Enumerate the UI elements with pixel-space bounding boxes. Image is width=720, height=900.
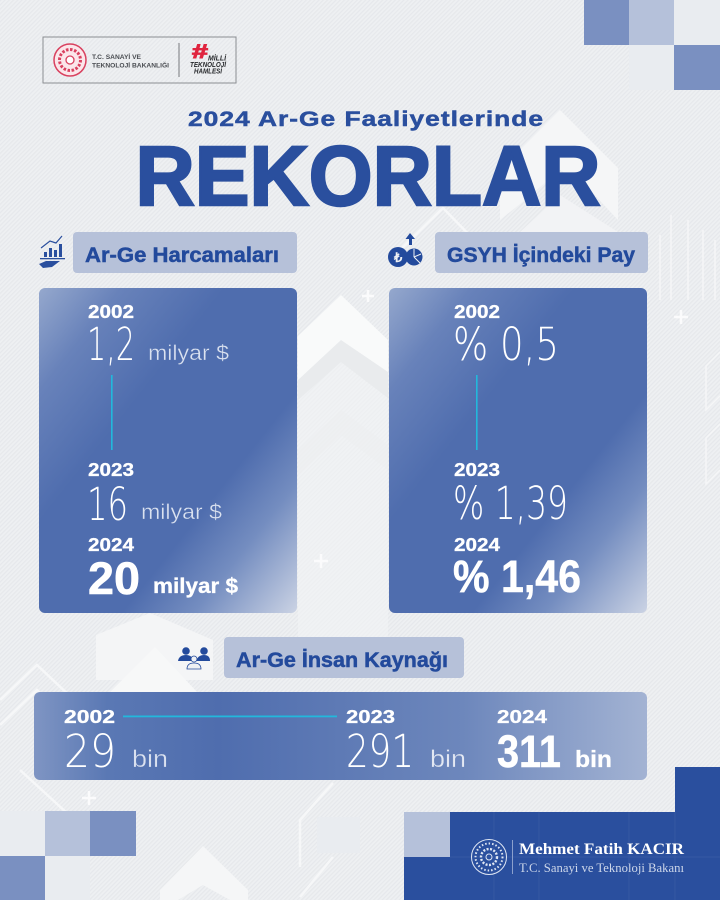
- value 2002: % 0,5: [453, 318, 559, 371]
- icon: coins and arrow: [388, 233, 422, 267]
- milli teknoloji hamlesi mark: HAMLESİ: [194, 68, 223, 76]
- bottom left squares: [0, 811, 136, 900]
- headline: REKORLAR: [136, 129, 600, 223]
- minister name: Mehmet Fatih KACIR: [519, 841, 685, 858]
- ministry name: TEKNOLOJİ BAKANLIĞI: [92, 60, 169, 70]
- value 2023: % 1,39: [453, 477, 568, 530]
- value 2024: 20: [88, 553, 140, 604]
- divider: [512, 840, 513, 874]
- divider: [178, 43, 180, 77]
- panel: Ar-Ge İnsan Kaynağı: 2023: [346, 707, 395, 727]
- panel: GSYH İçindeki Pay: 2024: [454, 535, 500, 555]
- milli teknoloji hamlesi mark: #: [192, 42, 209, 63]
- value 2023: [87, 478, 222, 531]
- panel: Ar-Ge İnsan Kaynağı: 2002: [64, 707, 115, 727]
- panel: Ar-Ge Harcamaları: 2024: [88, 535, 134, 555]
- section: Ar-Ge Harcamaları: [39, 232, 297, 273]
- value 2024: [497, 726, 612, 777]
- value 2024: [88, 553, 238, 604]
- ministry name: T.C. SANAYİ VE: [92, 53, 141, 61]
- panel: GSYH İçindeki Pay: 2023: [454, 460, 500, 480]
- heading pill: [435, 232, 648, 273]
- heading pill: Ar-Ge Harcamaları: [85, 244, 279, 267]
- footer: minister block: [404, 767, 720, 900]
- panel: Ar-Ge Harcamaları: 2002: [88, 302, 134, 322]
- heading pill: Ar-Ge İnsan Kaynağı: [236, 649, 448, 672]
- icon: people: [178, 647, 210, 669]
- heading pill: [224, 637, 464, 678]
- value 2023: 291: [346, 725, 414, 778]
- icon: ministry emblem: [54, 44, 86, 76]
- panel: Ar-Ge Harcamaları: 2023: [88, 460, 134, 480]
- section: GSYH İçindeki Pay: [388, 232, 648, 273]
- connector line: [476, 375, 478, 450]
- value 2023: milyar $: [141, 501, 222, 524]
- value 2024: bin: [575, 746, 612, 772]
- panel: GSYH İçindeki Pay: 2002: [454, 302, 500, 322]
- milli teknoloji hamlesi mark: TEKNOLOJİ: [190, 61, 227, 69]
- icon: coins and arrow: ₺: [393, 250, 403, 265]
- value 2002: [87, 318, 229, 371]
- icon: ministry emblem: [472, 840, 506, 874]
- value 2023: 16: [87, 478, 128, 531]
- value 2002: milyar $: [148, 342, 229, 365]
- milli teknoloji hamlesi mark: [190, 42, 227, 76]
- value 2024: % 1,46: [453, 551, 581, 602]
- value 2023: bin: [430, 746, 466, 773]
- value 2002: bin: [132, 746, 168, 773]
- value 2002: 1,2: [87, 318, 135, 371]
- panel: Ar-Ge Harcamaları: [39, 288, 297, 613]
- value 2002: 29: [64, 725, 116, 778]
- section: Ar-Ge İnsan Kaynağı: [178, 637, 464, 678]
- panel: Ar-Ge İnsan Kaynağı: [34, 692, 647, 780]
- icon: hand with bar chart: [39, 236, 65, 268]
- panel: Ar-Ge İnsan Kaynağı: 2024: [497, 707, 547, 727]
- connector line: [123, 716, 337, 717]
- heading pill: [73, 232, 297, 273]
- value 2024: 311: [497, 726, 561, 777]
- subtitle line: 2024 Ar-Ge Faaliyetlerinde: [188, 107, 544, 131]
- minister title: T.C. Sanayi ve Teknoloji Bakanı: [519, 860, 684, 875]
- value 2024: milyar $: [153, 575, 238, 598]
- ministry name: [92, 53, 169, 70]
- value 2002: [64, 725, 168, 778]
- title: [136, 107, 600, 223]
- top right squares: [584, 0, 720, 90]
- milli teknoloji hamlesi mark: MİLLİ: [208, 54, 227, 62]
- heading pill: GSYH İçindeki Pay: [447, 244, 635, 267]
- panel: GSYH İçindeki Pay: [389, 288, 647, 613]
- connector line: [111, 375, 113, 450]
- logo box: [43, 37, 236, 83]
